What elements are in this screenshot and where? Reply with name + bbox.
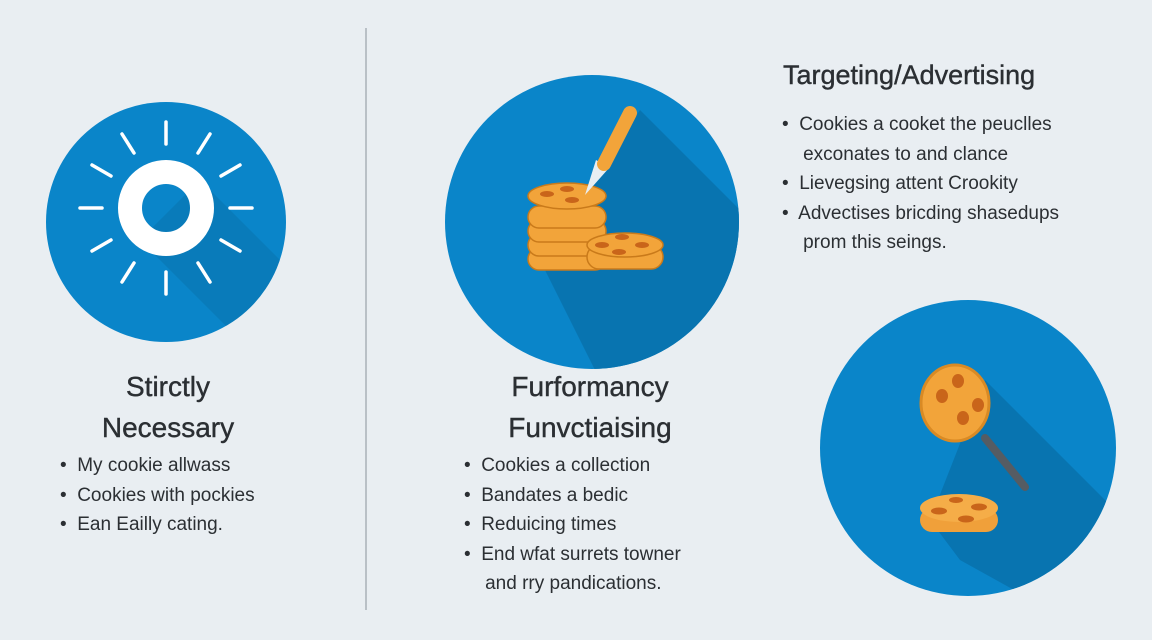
bullets: performance bbox=[464, 455, 681, 594]
icon: sun circle bbox=[46, 102, 286, 342]
bullets: targeting: • Cookies a cooket the peuclles bbox=[782, 114, 1052, 135]
icon: cookie stack with pen bbox=[445, 75, 739, 369]
heading: targeting: Targeting/Advertising bbox=[783, 60, 1035, 90]
bullets: performance: • Bandates a bedic bbox=[464, 484, 628, 506]
heading: performance: Furformancy bbox=[511, 371, 669, 402]
bullets: performance: and rry pandications. bbox=[485, 573, 662, 594]
bullets: performance: • End wfat surrets towner bbox=[464, 544, 681, 564]
bullets: targeting: prom this seings. bbox=[803, 232, 947, 253]
heading: strictly necessary bbox=[102, 371, 234, 444]
heading: strictly necessary: Stirctly bbox=[126, 371, 210, 402]
icon: cookie with magnifier bbox=[820, 300, 1130, 610]
bullets: strictly necessary bbox=[60, 455, 255, 535]
bullets: strictly necessary: • Ean Eailly cating. bbox=[60, 514, 223, 535]
heading: strictly necessary: Necessary bbox=[102, 412, 234, 443]
bullets: targeting: exconates to and clance bbox=[803, 144, 1008, 164]
bullets: strictly necessary: • My cookie allwass bbox=[60, 455, 230, 476]
bullets: strictly necessary: • Cookies with pockies bbox=[60, 484, 255, 506]
bullets: performance: • Cookies a collection bbox=[464, 455, 650, 476]
bullets: targeting: • Advectises bricding shasedups bbox=[782, 202, 1059, 224]
heading: performance bbox=[508, 371, 672, 444]
divider bbox=[365, 28, 367, 610]
bullets: targeting: • Lievegsing attent Crookity bbox=[782, 173, 1018, 194]
heading: performance: Funvctiaising bbox=[508, 412, 672, 443]
bullets: performance: • Reduicing times bbox=[464, 514, 616, 535]
bullets: targeting bbox=[782, 114, 1059, 253]
